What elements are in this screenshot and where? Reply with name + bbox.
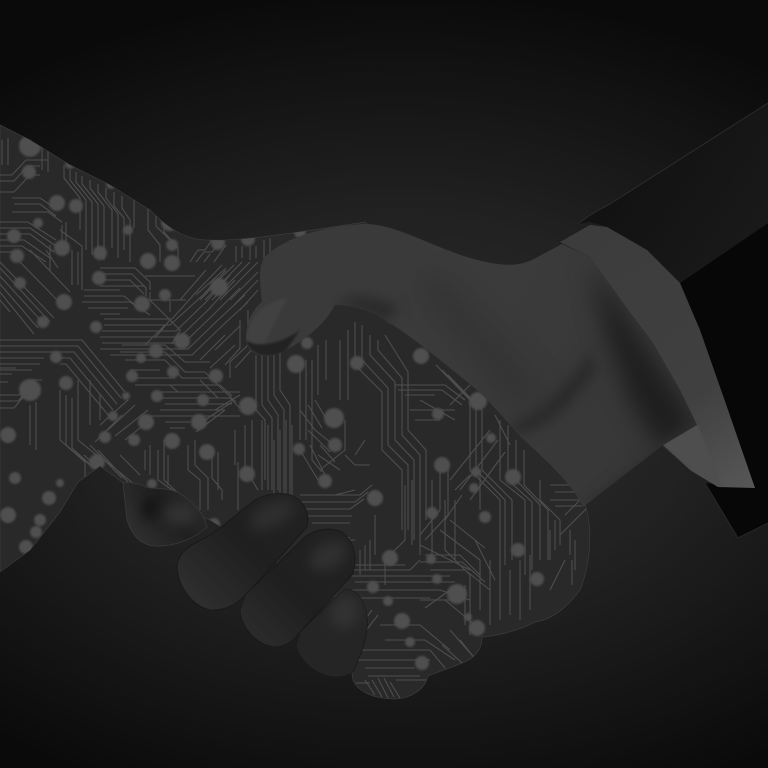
lower wrist shading: [583, 430, 690, 507]
suit sleeve: [578, 103, 768, 538]
circuit nodes: [0, 135, 544, 670]
sleeve lower black panel: [680, 223, 768, 538]
thumbnail: [246, 298, 288, 355]
shirt cuff: [560, 225, 755, 488]
index finger: [177, 494, 308, 610]
hand shading: [246, 282, 696, 451]
thumb web shadow: [346, 296, 394, 320]
cuff shadow: [593, 282, 695, 444]
wrinkle shading: [420, 270, 550, 410]
cuff band: [560, 225, 755, 488]
palm and thumb: [246, 224, 697, 507]
thumb tip finger: [123, 483, 207, 546]
thumb tip shadow: [246, 330, 300, 356]
circuit hand: [0, 125, 590, 699]
human fingers: [123, 483, 367, 677]
sleeve top edge highlight: [578, 103, 768, 224]
middle finger: [240, 529, 355, 647]
ring finger: [296, 589, 367, 677]
human hand: [246, 224, 697, 507]
illustration: handshake between human and circuit hand: [0, 102, 768, 700]
palm crease shadow: [517, 362, 593, 432]
sleeve bottom edge highlight: [705, 483, 768, 538]
circuit hand silhouette: [0, 125, 590, 699]
cuff lower inner fold: [663, 424, 722, 487]
sleeve upper fabric: [578, 103, 768, 283]
circuit traces: [0, 138, 590, 698]
